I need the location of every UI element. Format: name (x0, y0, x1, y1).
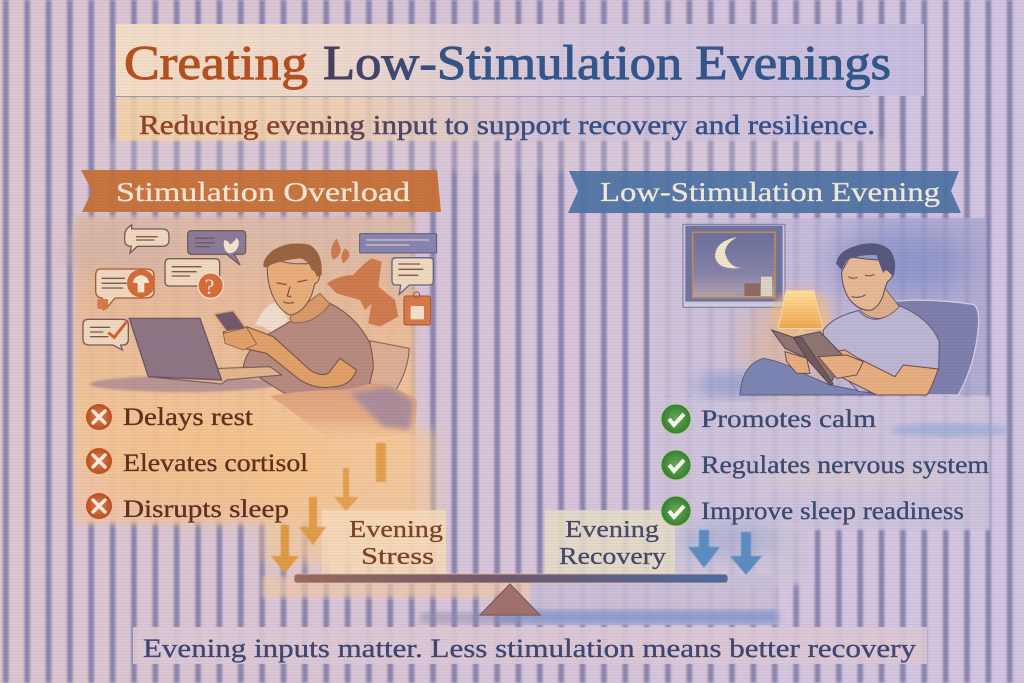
moon (715, 237, 747, 268)
item: delays rest (86, 404, 253, 431)
item: improve sleep readiness: Improve sleep readiness (701, 498, 964, 525)
blanket (270, 383, 417, 440)
beam (294, 574, 728, 583)
stress arrows (271, 443, 386, 573)
item: promotes calm (661, 404, 877, 434)
neck (290, 293, 330, 323)
face (263, 243, 322, 315)
panel: subtitle (117, 97, 875, 141)
question circle: ? (205, 274, 214, 299)
balance scale (294, 574, 728, 615)
screen panel (360, 234, 437, 253)
fulcrum (480, 584, 540, 615)
hand right (818, 355, 863, 378)
item: elevates cortisol (86, 448, 308, 477)
label: evening recovery: Recovery (559, 544, 666, 570)
panel: title (116, 24, 924, 97)
list: recovery benefits (661, 404, 990, 526)
white pillow behind (255, 303, 288, 335)
label: evening stress (322, 510, 446, 575)
small orange tab (97, 299, 108, 309)
item: delays rest: Delays rest (123, 404, 253, 431)
scale base glow (262, 575, 778, 625)
stress flames (327, 238, 398, 327)
question circle (198, 273, 223, 299)
hand left (785, 352, 810, 373)
title text: Creating (124, 35, 308, 90)
subtitle text: Reducing evening input to support recovery and resilience. (139, 110, 875, 140)
banner: stimulation overload (81, 170, 441, 212)
calendar (404, 292, 431, 325)
item: disrupts sleep: Disrupts sleep (123, 496, 289, 523)
panel: stimulation overload background (60, 216, 437, 565)
chair (895, 300, 979, 395)
illustration: person on phone and laptop (83, 225, 437, 440)
book (772, 330, 844, 385)
banner: low-stimulation evening (568, 171, 961, 213)
recovery arrows (688, 530, 762, 575)
footer message: Evening inputs matter. Less stimulation means better recovery (143, 634, 916, 663)
banner: low-stimulation evening: Low-Stimulation Evening (600, 177, 940, 207)
footer message (133, 627, 927, 664)
arm (818, 350, 938, 395)
item: elevates cortisol: Elevates cortisol (123, 450, 308, 477)
windowsill items (761, 277, 772, 296)
framed window (683, 224, 785, 307)
fingers (223, 327, 257, 350)
item: disrupts sleep (86, 493, 289, 523)
title text: Low-Stimulation Evenings (323, 35, 891, 90)
desk shadow (90, 376, 277, 392)
lamp (771, 288, 831, 342)
headboard pillow (370, 341, 409, 392)
alert circle with arrow (127, 269, 155, 297)
face (836, 243, 895, 310)
checkmark (108, 322, 126, 337)
notification bubbles (83, 225, 433, 350)
title text (124, 35, 891, 90)
neck (860, 288, 899, 318)
label: evening recovery: Evening (565, 517, 659, 543)
label: evening stress: Stress (361, 544, 434, 570)
legs (740, 358, 880, 395)
bird glyph (224, 238, 239, 253)
arm (223, 327, 357, 387)
label: evening stress: Evening (349, 517, 443, 543)
blanket folds (350, 387, 413, 430)
list: stimulation effects (86, 404, 308, 523)
banner: stimulation overload: Stimulation Overload (116, 177, 411, 207)
item: promotes calm: Promotes calm (701, 406, 877, 433)
label: evening recovery (545, 510, 675, 575)
bubble lines (90, 237, 423, 337)
panel: low-stimulation background (650, 218, 1010, 585)
phone (214, 311, 246, 332)
laptop base (148, 367, 282, 384)
shirt (243, 303, 373, 400)
illustration: person reading by lamp (683, 224, 979, 395)
item: regulates nervous system: Regulates nervous system (701, 452, 990, 479)
laptop screen (129, 318, 222, 380)
shirt (823, 306, 939, 395)
